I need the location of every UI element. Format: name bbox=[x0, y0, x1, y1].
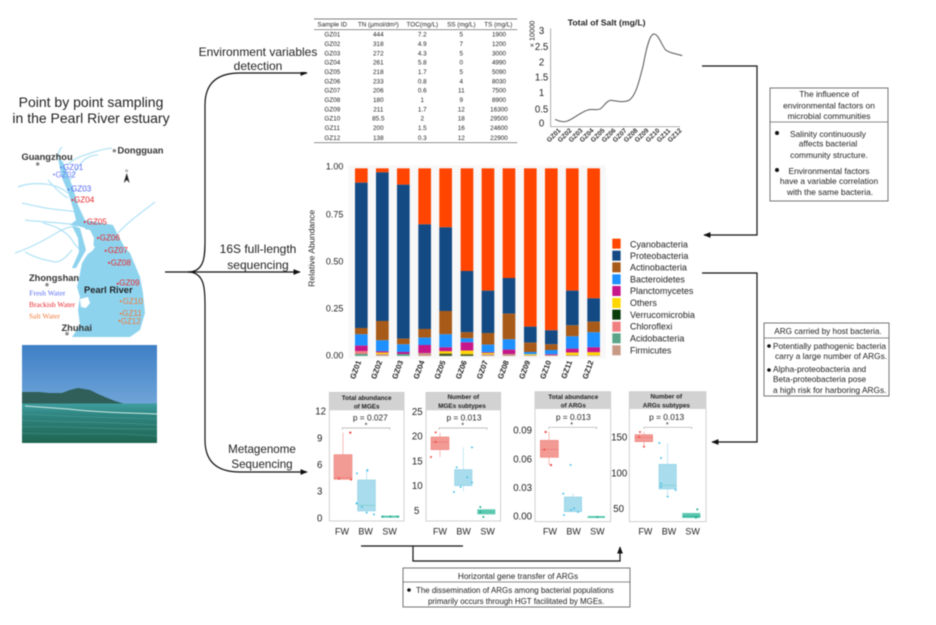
table: environmental variables: 444 bbox=[373, 32, 384, 39]
callout: ARG host bacteria: Beta-proteobacteria pose bbox=[773, 374, 867, 384]
sample points: GZ07 bbox=[108, 246, 128, 255]
table: environmental variables: TN (μmol/dm³) bbox=[358, 22, 399, 29]
table: environmental variables: 0 bbox=[460, 60, 464, 67]
table: environmental variables: GZ09 bbox=[324, 106, 341, 113]
map legend: Brackish Water bbox=[29, 300, 76, 309]
bars bbox=[355, 168, 600, 356]
table: environmental variables: 233 bbox=[373, 78, 384, 85]
boxplot: number of ARGs subtypes: p = 0.013 bbox=[649, 412, 684, 422]
table: environmental variables: TS (mg/L) bbox=[484, 22, 512, 29]
boxplot: total abundance of ARGs bbox=[513, 392, 611, 537]
callout: environmental influence: with the same bacteria. bbox=[786, 187, 873, 197]
arrow: environment to community bbox=[702, 66, 757, 235]
line chart: total of salt: × 10000 bbox=[527, 21, 536, 47]
boxplot: number of MGEs subtypes bbox=[412, 392, 501, 537]
sample points: GZ03 bbox=[71, 184, 92, 194]
sample points: GZ08 bbox=[111, 258, 131, 268]
map legend: Fresh Water bbox=[29, 288, 66, 298]
legend: Acidobacteria bbox=[630, 333, 684, 343]
table: environmental variables: 5 bbox=[460, 50, 464, 57]
label: environment variables bbox=[198, 44, 318, 73]
table: environmental variables bbox=[314, 19, 517, 143]
table: environmental variables: 4.3 bbox=[418, 50, 427, 57]
line chart: total of salt: GZ09 bbox=[634, 127, 651, 144]
table: environmental variables: 16300 bbox=[490, 106, 508, 113]
title: sampling: Point by point sampling bbox=[19, 94, 163, 110]
title: sampling bbox=[12, 94, 170, 126]
boxplot: total abundance of MGEs: p = 0.027 bbox=[353, 413, 388, 423]
place names bbox=[22, 146, 164, 335]
boxplot: total abundance of ARGs: Total abundance bbox=[548, 394, 599, 401]
boxplot: number of ARGs subtypes bbox=[611, 392, 706, 537]
table: environmental variables: GZ02 bbox=[324, 41, 341, 48]
place names: Zhuhai bbox=[62, 323, 92, 333]
boxplot: total abundance of MGEs: 6 bbox=[317, 460, 322, 471]
sample points: GZ04 bbox=[74, 196, 95, 204]
callout: ARG host bacteria: Alpha-proteobacteria and bbox=[773, 364, 867, 374]
boxplot: number of MGEs subtypes: BW bbox=[456, 527, 471, 537]
boxplot: total abundance of ARGs: FW bbox=[543, 527, 557, 537]
x labels bbox=[348, 359, 596, 380]
legend: Bacteroidetes bbox=[630, 274, 685, 284]
table: environmental variables: 138 bbox=[373, 135, 384, 142]
table: environmental variables: Sample ID bbox=[318, 22, 348, 29]
boxplot: number of MGEs subtypes: FW bbox=[433, 527, 447, 537]
table: environmental variables: 5.8 bbox=[418, 60, 427, 67]
arrow: MGEs to ARGs bbox=[361, 546, 620, 561]
x labels: GZ06 bbox=[454, 359, 469, 380]
boxplot: total abundance of MGEs: SW bbox=[382, 527, 397, 537]
line chart: total of salt: 2.5 bbox=[535, 42, 548, 53]
callout: environmental influence: community structure. bbox=[790, 150, 868, 160]
line chart: total of salt: Total of Salt (mg/L) bbox=[568, 17, 646, 27]
x labels: GZ02 bbox=[369, 359, 384, 380]
table: environmental variables: GZ12 bbox=[324, 135, 341, 142]
boxplot: number of ARGs subtypes: BW bbox=[662, 527, 677, 537]
table: environmental variables: SS (mg/L) bbox=[447, 22, 476, 29]
line chart: total of salt: 1.5 bbox=[535, 73, 548, 84]
table: environmental variables: 1.7 bbox=[418, 106, 427, 113]
table: environmental variables: GZ05 bbox=[324, 69, 341, 76]
callout: environmental influence bbox=[770, 88, 888, 201]
boxplot: total abundance of ARGs: 0.03 bbox=[513, 483, 532, 494]
boxplot: total abundance of MGEs: 0 bbox=[317, 513, 322, 524]
legend: Chloroflexi bbox=[630, 322, 672, 332]
boxplot: total abundance of MGEs: 3 bbox=[317, 487, 322, 498]
table: environmental variables: GZ04 bbox=[324, 60, 341, 67]
table: environmental variables: 272 bbox=[373, 50, 384, 57]
table: environmental variables: 4 bbox=[460, 78, 464, 85]
boxplot: total abundance of ARGs: * bbox=[570, 420, 573, 429]
line chart: total of salt: GZ03 bbox=[568, 127, 585, 144]
stacked bar chart: relative abundance: 0.50 bbox=[326, 257, 343, 267]
boxplot: total abundance of MGEs: FW bbox=[335, 527, 349, 537]
callout: horizontal gene transfer: The dissemination of ARGs among bacterial populations bbox=[416, 586, 614, 595]
callout: environmental influence: The influence of bbox=[799, 89, 859, 99]
table: environmental variables: GZ03 bbox=[324, 50, 341, 57]
boxplot: total abundance of ARGs: 0.06 bbox=[513, 454, 532, 465]
table: environmental variables: 2 bbox=[421, 116, 425, 123]
table: environmental variables: 7 bbox=[460, 41, 464, 48]
sample points: GZ01 bbox=[63, 163, 84, 172]
label: metagenome sequencing: Metagenome bbox=[228, 443, 296, 456]
x labels: GZ07 bbox=[475, 359, 490, 380]
map legend bbox=[29, 288, 76, 320]
stacked bar chart: relative abundance: 0.75 bbox=[326, 210, 343, 220]
table: environmental variables: 9 bbox=[460, 97, 464, 104]
stacked bar chart: relative abundance: 0.00 bbox=[326, 350, 343, 360]
label: metagenome sequencing: Sequencing bbox=[231, 458, 293, 471]
sample points: GZ09 bbox=[119, 279, 140, 288]
table: environmental variables: 1 bbox=[421, 97, 425, 104]
table: environmental variables: 1.5 bbox=[418, 125, 427, 132]
table: environmental variables: 1.7 bbox=[418, 69, 427, 76]
x labels: GZ11 bbox=[559, 359, 574, 380]
boxplot: total abundance of MGEs: Total abundance bbox=[342, 395, 392, 402]
boxplot: total abundance of MGEs bbox=[315, 392, 404, 537]
table: environmental variables: 5 bbox=[460, 69, 464, 76]
callout: environmental influence: Environmental factors bbox=[788, 166, 870, 176]
table: environmental variables: 29500 bbox=[490, 116, 508, 123]
line chart: total of salt: GZ08 bbox=[623, 127, 640, 144]
label: 16S sequencing bbox=[220, 242, 296, 272]
boxplot: number of MGEs subtypes: SW bbox=[480, 527, 495, 537]
boxplot: number of MGEs subtypes: 15 bbox=[412, 456, 423, 467]
boxplot: number of MGEs subtypes: 5 bbox=[414, 506, 419, 517]
table: environmental variables: 0.3 bbox=[418, 135, 427, 142]
photo: estuary view bbox=[22, 345, 157, 443]
label: environment variables: Environment variables bbox=[199, 45, 317, 59]
table: environmental variables: 5 bbox=[460, 32, 464, 39]
table: environmental variables: 16 bbox=[458, 125, 465, 132]
x labels: GZ09 bbox=[517, 359, 532, 380]
boxplot: total abundance of MGEs: 12 bbox=[315, 406, 326, 417]
table: environmental variables: TOC(mg/L) bbox=[407, 22, 438, 29]
table: environmental variables: 0.8 bbox=[418, 78, 427, 85]
table: environmental variables: 3000 bbox=[492, 50, 506, 57]
map: Pearl River estuary bbox=[15, 146, 164, 337]
callout: ARG host bacteria: a high risk for harboring ARGs. bbox=[773, 385, 886, 395]
legend: Planctomycetes bbox=[630, 286, 694, 296]
line chart: total of salt: 1 bbox=[539, 88, 544, 99]
callout: environmental influence: affects bacterial bbox=[799, 138, 857, 148]
line chart: total of salt: GZ11 bbox=[656, 127, 672, 144]
label: metagenome sequencing bbox=[228, 443, 296, 471]
stacked bar chart: relative abundance bbox=[306, 162, 695, 380]
place names: Dongguan bbox=[118, 146, 164, 156]
x labels: GZ03 bbox=[390, 359, 405, 380]
line chart: total of salt: 3 bbox=[539, 26, 544, 37]
boxplot: number of ARGs subtypes: ARGs subtypes bbox=[643, 402, 690, 409]
table: environmental variables: 261 bbox=[373, 60, 384, 67]
table: environmental variables: 22900 bbox=[490, 135, 508, 142]
callout: horizontal gene transfer: primarily occurs through HGT facilitated by MGEs. bbox=[428, 597, 604, 606]
callout: ARG host bacteria: carry a large number of ARGs. bbox=[775, 351, 887, 361]
boxplot: number of ARGs subtypes: * bbox=[666, 420, 669, 429]
boxplot: total abundance of MGEs: of MGEs bbox=[354, 403, 380, 410]
table: environmental variables: 12 bbox=[458, 135, 465, 142]
boxplot: number of MGEs subtypes: Number of bbox=[447, 394, 480, 401]
callout: ARG host bacteria: ARG carried by host bacteria. bbox=[774, 327, 882, 336]
line chart: total of salt: 0.5 bbox=[535, 104, 548, 115]
line chart: total of salt: GZ06 bbox=[601, 127, 618, 144]
boxplot: total abundance of ARGs: 0.00 bbox=[513, 511, 532, 522]
legend: Others bbox=[630, 298, 657, 308]
branching arrows: sequencing methods bbox=[165, 73, 307, 472]
boxplot: number of MGEs subtypes: * bbox=[461, 421, 464, 430]
x labels: GZ12 bbox=[581, 359, 596, 380]
legend: Actinobacteria bbox=[630, 263, 687, 273]
callout: horizontal gene transfer bbox=[403, 568, 630, 607]
table: environmental variables: GZ11 bbox=[325, 125, 340, 132]
arrow: bacteria to ARG plots bbox=[702, 273, 757, 442]
boxplot: total abundance of MGEs: * bbox=[365, 421, 368, 430]
map legend: Salt Water bbox=[29, 312, 61, 320]
boxplot: total abundance of ARGs: SW bbox=[590, 527, 605, 537]
place names: Zhongshan bbox=[29, 273, 79, 283]
line chart: total of salt: GZ04 bbox=[579, 127, 596, 144]
boxplot: number of MGEs subtypes: MGEs subtypes bbox=[438, 403, 486, 410]
boxplot: total abundance of ARGs: 0.09 bbox=[513, 425, 532, 436]
legend: Cyanobacteria bbox=[630, 239, 688, 249]
legend: Proteobacteria bbox=[630, 251, 688, 261]
boxplot: number of MGEs subtypes: 10 bbox=[412, 481, 423, 492]
callout: horizontal gene transfer: Horizontal gene transfer of ARGs bbox=[458, 572, 578, 581]
table: environmental variables: 24600 bbox=[490, 125, 508, 132]
label: 16S sequencing: sequencing bbox=[227, 258, 289, 272]
line chart: total of salt bbox=[527, 17, 684, 144]
table: environmental variables: 4.9 bbox=[418, 41, 427, 48]
line chart: total of salt: 2 bbox=[539, 57, 544, 68]
stacked bar chart: relative abundance: 0.25 bbox=[326, 304, 343, 314]
x labels: GZ04 bbox=[412, 359, 427, 380]
line chart: total of salt: GZ02 bbox=[557, 127, 574, 144]
line chart: total of salt: GZ10 bbox=[645, 127, 662, 144]
table: environmental variables: 8900 bbox=[492, 97, 506, 104]
line chart: total of salt: GZ05 bbox=[590, 127, 607, 144]
table: environmental variables: 18 bbox=[458, 116, 465, 123]
sample points: GZ12 bbox=[121, 317, 141, 326]
table: environmental variables: 211 bbox=[373, 106, 384, 113]
sample points: GZ11 bbox=[122, 309, 142, 318]
x labels: GZ01 bbox=[348, 359, 363, 380]
boxplot: number of MGEs subtypes: 20 bbox=[412, 432, 423, 443]
table: environmental variables: 200 bbox=[373, 125, 384, 132]
boxplot: total abundance of ARGs: p = 0.013 bbox=[556, 412, 591, 422]
table: environmental variables: GZ10 bbox=[324, 116, 341, 123]
callout: environmental influence: microbial communities bbox=[788, 111, 870, 121]
sample points: GZ06 bbox=[100, 234, 120, 242]
sample points: GZ05 bbox=[87, 218, 107, 226]
table: environmental variables: 1900 bbox=[492, 32, 506, 39]
callout: ARG host bacteria bbox=[764, 323, 889, 396]
boxplot: total abundance of MGEs: 9 bbox=[317, 434, 322, 445]
boxplot: total abundance of MGEs: BW bbox=[358, 527, 373, 537]
line chart: total of salt: 0 bbox=[539, 119, 544, 130]
title: sampling: in the Pearl River estuary bbox=[12, 110, 170, 126]
callout: environmental influence: Salinity continuously bbox=[790, 129, 867, 139]
table: environmental variables: GZ06 bbox=[324, 78, 341, 85]
label: 16S sequencing: 16S full-length bbox=[220, 242, 296, 256]
sample points bbox=[53, 163, 143, 326]
table: environmental variables: 4990 bbox=[492, 60, 506, 67]
table: environmental variables: 206 bbox=[373, 88, 384, 95]
label: environment variables: detection bbox=[234, 59, 282, 73]
table: environmental variables: 218 bbox=[373, 69, 384, 76]
table: environmental variables: 85.5 bbox=[372, 116, 385, 123]
line chart: total of salt: GZ07 bbox=[612, 127, 629, 144]
table: environmental variables: 7.2 bbox=[418, 32, 427, 39]
boxplot: number of ARGs subtypes: 150 bbox=[611, 433, 627, 444]
callout: environmental influence: have a variable correlation bbox=[780, 176, 878, 186]
line chart: total of salt: GZ01 bbox=[546, 127, 563, 144]
boxplot: number of ARGs subtypes: 50 bbox=[613, 504, 624, 515]
stacked bar chart: relative abundance: 1.00 bbox=[326, 162, 343, 172]
place names: Guangzhou bbox=[22, 152, 73, 162]
sample points: GZ02 bbox=[56, 170, 76, 180]
table: environmental variables: 11 bbox=[458, 88, 465, 95]
sample points: GZ10 bbox=[123, 297, 143, 306]
table: environmental variables: 12 bbox=[458, 106, 465, 113]
table: environmental variables: 5090 bbox=[492, 69, 506, 76]
boxplot: number of MGEs subtypes: p = 0.013 bbox=[446, 412, 482, 422]
boxplot: number of ARGs subtypes: FW bbox=[638, 527, 653, 537]
boxplot: number of ARGs subtypes: Number of bbox=[650, 393, 683, 400]
line chart: total of salt: GZ12 bbox=[667, 127, 684, 144]
x labels: GZ08 bbox=[496, 359, 511, 380]
boxplot: number of MGEs subtypes: 25 bbox=[412, 407, 423, 418]
boxplot: total abundance of ARGs: BW bbox=[566, 527, 581, 537]
place names: Pearl River bbox=[84, 285, 133, 295]
table: environmental variables: 318 bbox=[373, 41, 384, 48]
table: environmental variables: GZ01 bbox=[324, 32, 341, 39]
table: environmental variables: GZ08 bbox=[324, 97, 341, 104]
table: environmental variables: 0.6 bbox=[418, 88, 427, 95]
table: environmental variables: 180 bbox=[373, 97, 384, 104]
callout: environmental influence: environmental factors on bbox=[783, 100, 875, 110]
x labels: GZ05 bbox=[433, 359, 448, 380]
estuary water bbox=[15, 147, 155, 337]
table: environmental variables: GZ07 bbox=[324, 88, 341, 95]
legend bbox=[612, 239, 695, 355]
boxplot: number of ARGs subtypes: 100 bbox=[611, 468, 627, 479]
north arrow: N bbox=[125, 169, 128, 173]
table: environmental variables: 8030 bbox=[492, 78, 506, 85]
boxplot: total abundance of ARGs: of ARGs bbox=[561, 402, 586, 409]
callout: ARG host bacteria: Potentially pathogenic bacteria bbox=[773, 341, 886, 351]
x labels: GZ10 bbox=[538, 359, 553, 380]
stacked bar chart: relative abundance: Relative Abundance bbox=[306, 210, 316, 287]
north arrow bbox=[124, 169, 130, 183]
legend: Verrucomicrobia bbox=[630, 310, 695, 320]
table: environmental variables: 1200 bbox=[492, 41, 506, 48]
boxplot: number of ARGs subtypes: SW bbox=[685, 527, 700, 537]
legend: Firmicutes bbox=[630, 345, 672, 355]
table: environmental variables: 7500 bbox=[492, 88, 506, 95]
